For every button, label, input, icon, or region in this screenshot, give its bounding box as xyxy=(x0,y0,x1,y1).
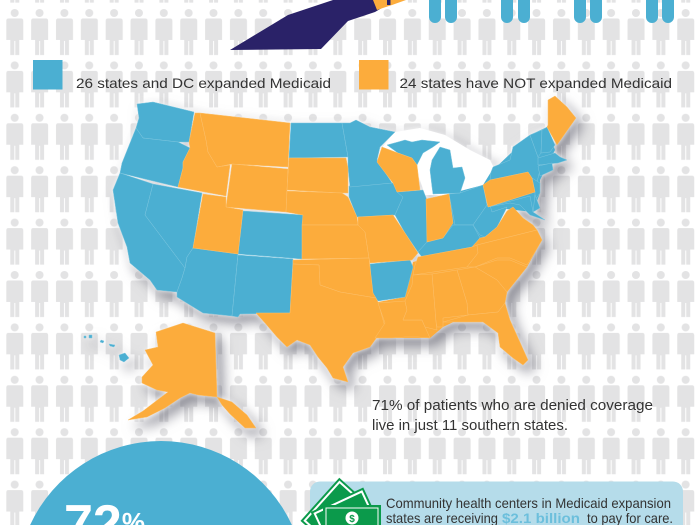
icon: blue legs of figures at top xyxy=(429,0,674,23)
icon: stack of green money xyxy=(302,479,381,525)
panel: community health center funding xyxy=(302,479,683,525)
blue expansion states xyxy=(113,102,567,317)
circle: 72% statistic xyxy=(30,441,292,525)
map: United States by Medicaid expansion status xyxy=(84,96,576,428)
white Great Lakes backing xyxy=(380,128,495,195)
orange non-expansion states xyxy=(178,96,576,382)
panel text xyxy=(386,498,672,525)
Alaska xyxy=(128,323,256,428)
legend: expansion states xyxy=(33,60,672,91)
callout: southern states statistic: live in just 11 southern states. xyxy=(372,417,568,434)
legend label: not expanded: 24 states have NOT expanded Medicaid xyxy=(400,75,672,91)
callout: southern states statistic xyxy=(372,397,653,434)
land underlay: northeast xyxy=(483,127,555,212)
callout: southern states statistic: 71% of patients who are denied coverage xyxy=(372,397,653,414)
legend swatch: not expanded xyxy=(359,60,388,90)
legend label: expanded: 26 states and DC expanded Medicaid xyxy=(76,75,331,91)
legend swatch: expanded xyxy=(33,60,62,90)
icon: navy pen or tie shape at top xyxy=(230,0,406,50)
panel text: Community health centers in Medicaid expansion xyxy=(386,495,671,511)
icon: stack of green money: $ xyxy=(349,514,355,525)
land underlay: south xyxy=(375,230,542,338)
Hawaii xyxy=(84,335,129,362)
land underlay: midwest xyxy=(349,183,507,257)
